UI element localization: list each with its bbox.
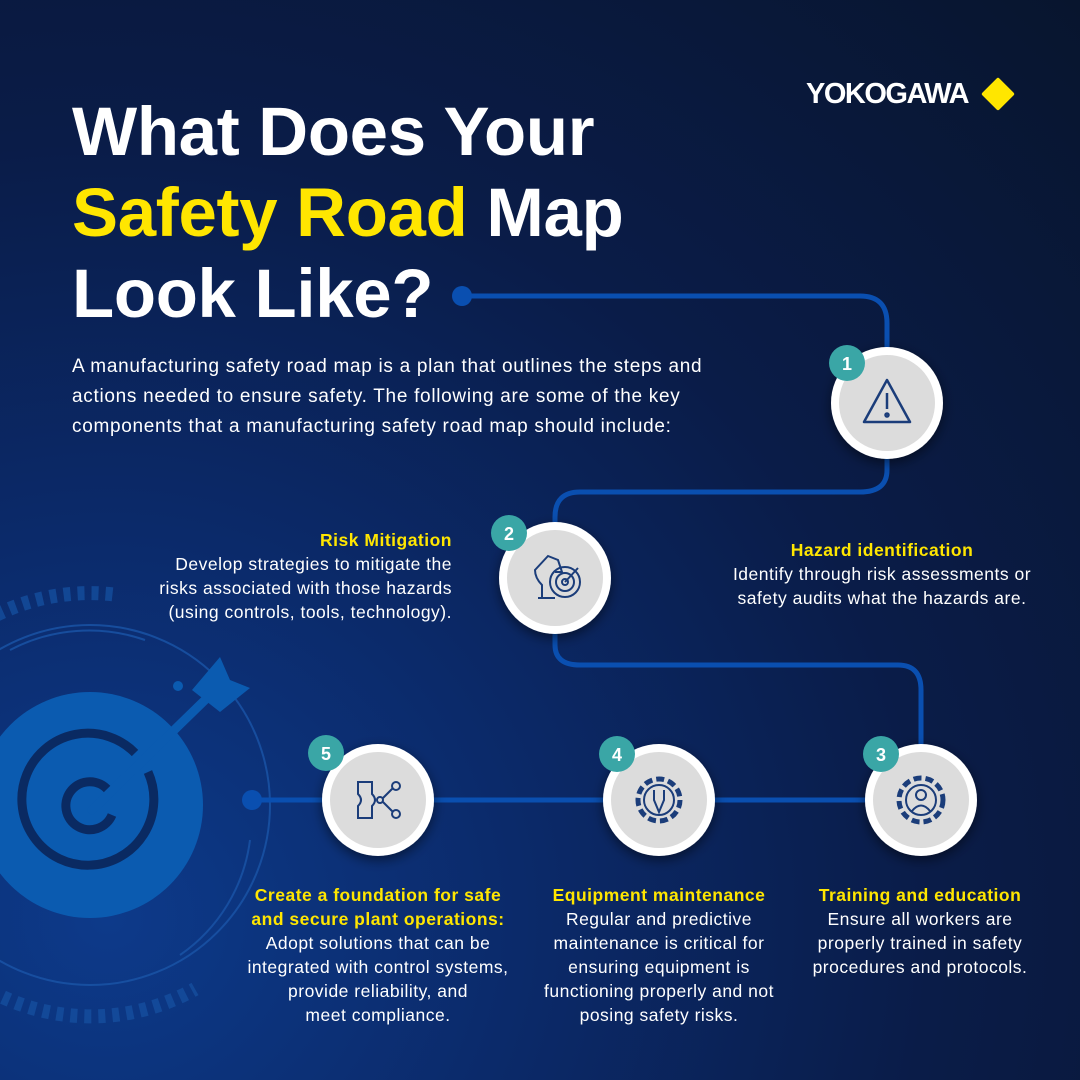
title: Safety Road Map [72, 174, 623, 251]
logo: YOKOGAWA [806, 78, 968, 110]
text: foundation: provide reliability, and [288, 981, 468, 1001]
step 5 circle: foundation [308, 735, 434, 856]
text: hazard identification [733, 540, 1031, 608]
step 3 circle: training [863, 736, 977, 856]
text: risk mitigation: Develop strategies to mitigate the [175, 554, 452, 574]
title: What Does Your [72, 93, 594, 170]
text: risk mitigation: Risk Mitigation [320, 530, 452, 550]
text: equipment maintenance [544, 885, 774, 1025]
step 2 circle: risk mitigation: 2 [504, 524, 514, 544]
step 4 circle: maintenance: 4 [612, 745, 622, 765]
text: equipment maintenance: Regular and predictive [566, 909, 752, 929]
text: hazard identification: Identify through risk assessments or [733, 564, 1031, 584]
step 3 circle: training: 3 [876, 745, 886, 765]
intro text [72, 356, 702, 437]
step 1 circle: hazard: 1 [842, 354, 852, 374]
text: foundation: meet compliance. [305, 1005, 451, 1025]
text: risk mitigation: (using controls, tools, technology). [168, 602, 452, 622]
text: training: Ensure all workers are [827, 909, 1013, 929]
text: training: Training and education [819, 885, 1021, 905]
text: training [813, 885, 1027, 977]
text: training: properly trained in safety [818, 933, 1022, 953]
text: foundation: integrated with control systems, [247, 957, 509, 977]
intro text: actions needed to ensure safety. The following are some of the key [72, 386, 680, 407]
intro text: A manufacturing safety road map is a plan that outlines the steps and [72, 356, 702, 377]
text: equipment maintenance: maintenance is critical for [554, 933, 764, 953]
step 2 circle: risk mitigation [491, 515, 611, 634]
text: equipment maintenance: ensuring equipment is [568, 957, 750, 977]
text: foundation: Create a foundation for safe [255, 885, 501, 905]
title [72, 93, 623, 332]
text: equipment maintenance: posing safety risks. [580, 1005, 738, 1025]
text: hazard identification: Hazard identification [791, 540, 973, 560]
step 1 circle: hazard [829, 345, 943, 459]
text: equipment maintenance: Equipment maintenance [553, 885, 765, 905]
text: hazard identification: safety audits what the hazards are. [738, 588, 1026, 608]
text: foundation: Adopt solutions that can be [266, 933, 490, 953]
text: foundation [247, 885, 509, 1025]
text: risk mitigation: risks associated with those hazards [159, 578, 452, 598]
title: Look Like? [72, 255, 433, 332]
road path line [252, 296, 921, 800]
icon: target with arrow [0, 657, 250, 918]
text: risk mitigation [159, 530, 452, 622]
text: training: procedures and protocols. [813, 957, 1027, 977]
step 4 circle: maintenance [599, 736, 715, 856]
intro text: components that a manufacturing safety road map should include: [72, 416, 672, 437]
text: equipment maintenance: functioning properly and not [544, 981, 774, 1001]
text: foundation: and secure plant operations: [251, 909, 505, 929]
step 5 circle: foundation: 5 [321, 744, 331, 764]
